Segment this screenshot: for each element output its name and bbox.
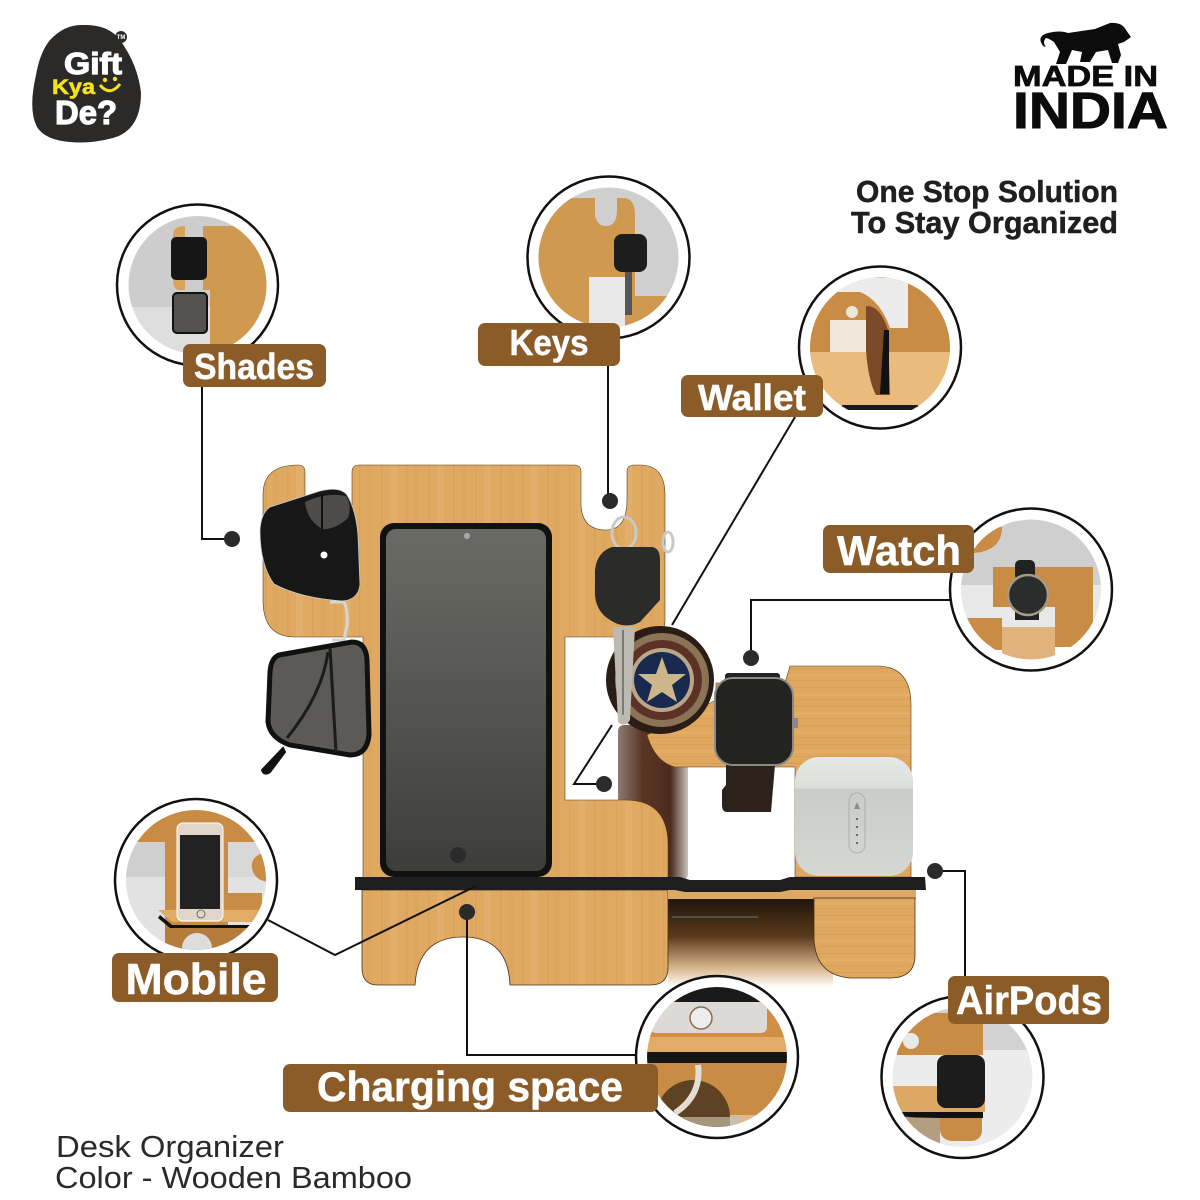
- label: Keys: Keys: [510, 322, 588, 363]
- panel: airpods: [882, 996, 1044, 1158]
- badge: Made in India: INDIA: [1013, 82, 1168, 139]
- lower sunglasses: [262, 642, 369, 774]
- wallet photo: [810, 278, 950, 410]
- airpods photo: [892, 1008, 1032, 1147]
- product description: Color - Wooden Bamboo: [55, 1160, 412, 1195]
- label: Shades: Shades: [194, 346, 314, 387]
- leather strap behind organizer: [618, 725, 688, 880]
- product: wooden desk organizer: [260, 465, 926, 987]
- right upper panel: [647, 666, 911, 877]
- smartwatch: [715, 673, 798, 812]
- label: Mobile: Mobile: [126, 955, 266, 1004]
- right shelf edge: [668, 888, 916, 899]
- car key: [595, 547, 660, 725]
- badge: Made in India: MADE IN: [1013, 61, 1158, 93]
- tagline: [851, 174, 1118, 240]
- medallion keychain: [606, 626, 714, 734]
- product description: Desk Organizer: [56, 1129, 284, 1164]
- keys photo: [538, 188, 678, 327]
- earbuds case: [795, 757, 913, 876]
- charging photo: [647, 987, 787, 1127]
- shades photo: [128, 216, 266, 352]
- badge: Made in India: [1013, 23, 1168, 139]
- tagline: One Stop Solution: [856, 174, 1118, 209]
- logo: Gift Kya De: Kya: [52, 76, 95, 99]
- phone: [380, 523, 552, 877]
- sunglasses bridge: [330, 602, 347, 640]
- label: Keys: [478, 322, 620, 366]
- tagline: To Stay Organized: [851, 205, 1118, 240]
- callout dots: [224, 493, 943, 920]
- panel: charging space: [636, 976, 800, 1154]
- panel: watch: [950, 508, 1112, 670]
- panel: keys: [528, 176, 690, 340]
- panel: wallet: [799, 266, 961, 428]
- main upright panel: [263, 465, 668, 880]
- logo: Gift Kya De: [32, 25, 141, 142]
- black shelf strip: [355, 877, 926, 892]
- top sunglasses: [260, 489, 360, 601]
- label: Watch: Watch: [837, 527, 961, 574]
- logo: Gift Kya De: TM: [117, 35, 125, 41]
- callout lines: [202, 366, 965, 1055]
- mobile photo: [126, 810, 266, 950]
- right foot: [814, 898, 915, 978]
- watch photo: [961, 520, 1101, 660]
- product description: [55, 1129, 412, 1195]
- panel: mobile: [115, 799, 277, 963]
- panel: shades: [117, 204, 280, 367]
- base front panel: [362, 890, 668, 985]
- logo: Gift Kya De: Gift: [64, 46, 122, 81]
- logo: Gift Kya De: De?: [55, 94, 117, 131]
- label: AirPods: AirPods: [956, 979, 1102, 1023]
- label: Wallet: Wallet: [698, 377, 806, 418]
- label: Charging space: Charging space: [317, 1063, 623, 1110]
- key rings: [612, 517, 673, 552]
- shadow under organizer: [668, 895, 833, 987]
